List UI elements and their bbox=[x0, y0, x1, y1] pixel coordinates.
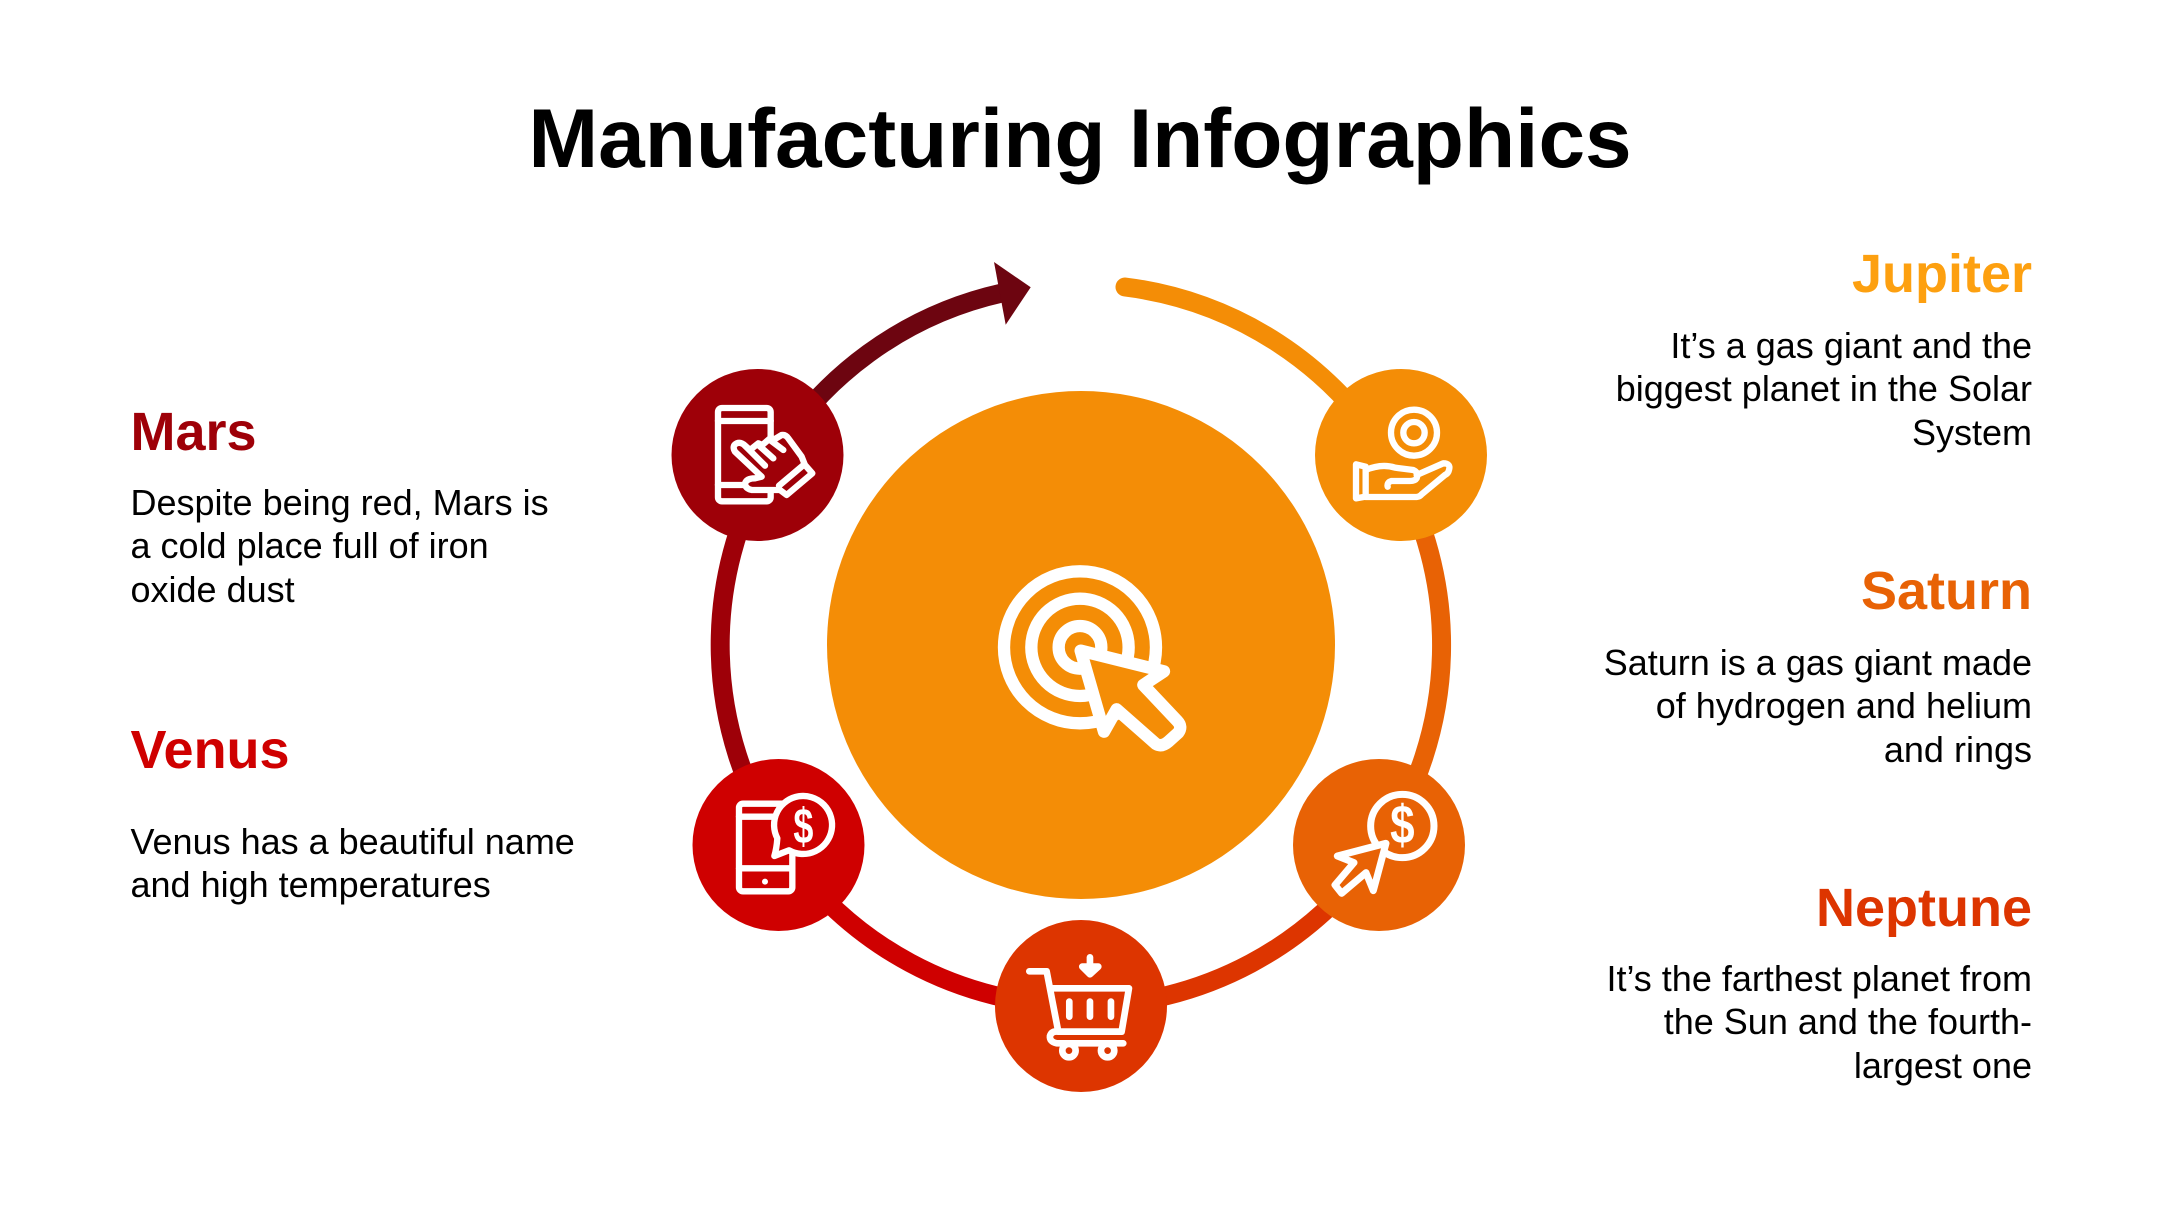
heading: Saturn: Saturn bbox=[1861, 561, 2032, 621]
arrow: closing arc with head bbox=[770, 262, 1031, 462]
central circle bbox=[827, 391, 1335, 899]
text: Venus description: and high temperatures bbox=[130, 864, 491, 905]
text: Jupiter description: System bbox=[1912, 412, 2032, 453]
text: Mars description: oxide dust bbox=[130, 569, 295, 610]
arc: Neptune segment bbox=[1081, 846, 1381, 1006]
node: Jupiter bbox=[1315, 369, 1487, 541]
text: Neptune description bbox=[1606, 958, 2032, 1086]
title: Manufacturing Infographics bbox=[528, 91, 1632, 185]
arc: Saturn segment bbox=[1381, 461, 1442, 846]
heading: Venus: Venus bbox=[130, 720, 290, 780]
node: Venus bbox=[692, 759, 864, 931]
text: Jupiter description: It’s a gas giant and the bbox=[1670, 325, 2032, 366]
text: Venus description bbox=[130, 821, 575, 905]
icon: target with cursor bbox=[1004, 571, 1180, 745]
node: Neptune bbox=[995, 920, 1167, 1092]
icon: phone with dollar bubble bbox=[739, 796, 832, 891]
text: Saturn description: of hydrogen and helium bbox=[1656, 685, 2032, 726]
icon: shopping cart bbox=[1029, 957, 1129, 1057]
text: Saturn description: Saturn is a gas giant made bbox=[1604, 642, 2032, 683]
text: Neptune description: the Sun and the fourth- bbox=[1664, 1001, 2032, 1042]
heading: Mars: Mars bbox=[130, 402, 257, 462]
arc: Mars segment bbox=[720, 462, 780, 844]
text: Saturn description: and rings bbox=[1884, 729, 2032, 770]
text: Neptune description: largest one bbox=[1854, 1045, 2032, 1086]
arc: Venus segment bbox=[780, 844, 1081, 1006]
icon: phone with tapping hand bbox=[718, 408, 812, 501]
icon: phone with dollar bubble: $ bbox=[793, 800, 813, 855]
icon: cursor clicking dollar coin bbox=[1335, 794, 1434, 893]
text: Mars description: Despite being red, Mars is bbox=[130, 482, 549, 523]
text: Jupiter description: biggest planet in the Solar bbox=[1616, 368, 2032, 409]
heading: Neptune: Neptune bbox=[1816, 878, 2032, 938]
text: Neptune description: It’s the farthest planet from bbox=[1606, 958, 2032, 999]
heading: Jupiter: Jupiter bbox=[1852, 244, 2032, 304]
node: Saturn bbox=[1293, 759, 1465, 931]
icon: hand holding coin bbox=[1356, 410, 1449, 498]
text: Mars description bbox=[130, 482, 549, 610]
arc: Jupiter segment bbox=[1125, 287, 1391, 461]
text: Mars description: a cold place full of iron bbox=[130, 525, 489, 566]
node: Mars bbox=[672, 369, 844, 541]
text: Venus description: Venus has a beautiful name bbox=[130, 821, 575, 862]
icon: cursor clicking dollar coin: $ bbox=[1390, 794, 1415, 855]
text: Jupiter description bbox=[1616, 325, 2032, 453]
text: Saturn description bbox=[1604, 642, 2032, 770]
